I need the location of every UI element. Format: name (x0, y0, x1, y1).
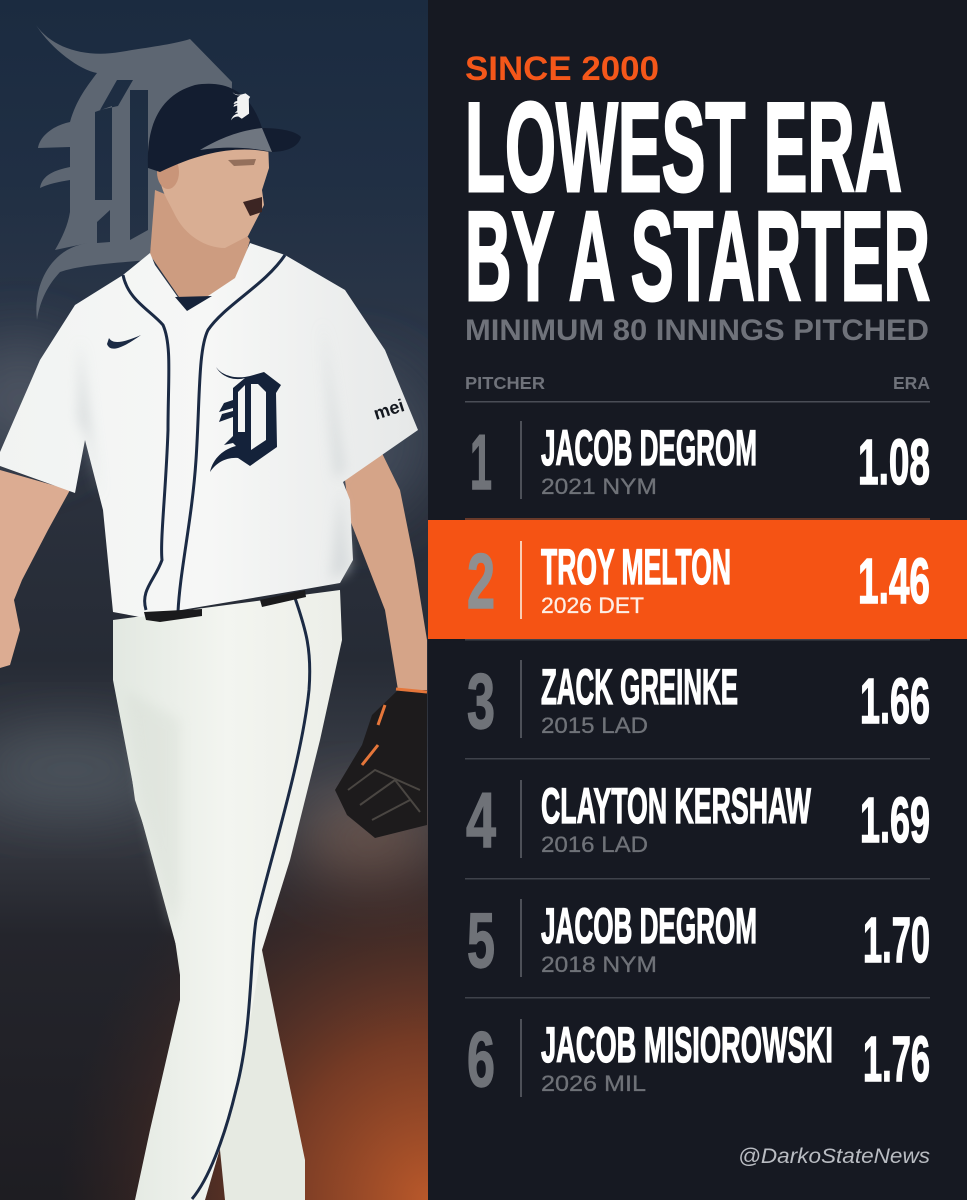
undershirt collar (175, 296, 212, 311)
sleeve patch text: mei (371, 395, 407, 424)
row 3: ZACK GREINKE (541, 659, 738, 715)
back leg (113, 640, 305, 1200)
table header: ERA (893, 373, 930, 393)
left arm and hand (0, 470, 70, 668)
row 2 highlighted: 2 (467, 537, 495, 625)
row 3 (465, 639, 930, 745)
row 6: 2026 MIL (541, 1071, 646, 1096)
table header (465, 373, 930, 402)
icon: chest D logo (210, 367, 281, 472)
panel: photo background (0, 0, 440, 1200)
table header: PITCHER (465, 373, 545, 393)
ear (157, 155, 179, 189)
title (465, 76, 930, 327)
row 5 (465, 878, 930, 984)
row 6 (465, 997, 930, 1103)
row 5: 2018 NYM (541, 952, 657, 977)
row 1: 2021 NYM (541, 474, 657, 499)
front pants (113, 590, 342, 1200)
icon: cap D logo (231, 92, 250, 120)
mouth (243, 197, 262, 216)
player figure (0, 84, 427, 1200)
glove (335, 690, 427, 838)
row 2 highlighted (428, 520, 967, 639)
row 3: 2015 LAD (541, 713, 648, 738)
icon: Tigers D watermark (36, 25, 232, 320)
right arm (345, 445, 427, 690)
subtitle: MINIMUM 80 INNINGS PITCHED (465, 314, 929, 347)
jersey (0, 243, 418, 617)
row 1 (465, 418, 930, 520)
row 2 highlighted: 2026 DET (541, 593, 644, 618)
row 2 highlighted: TROY MELTON (541, 539, 731, 595)
panel: stats background (428, 0, 967, 1200)
row 1: JACOB DEGROM (541, 420, 757, 476)
nike swoosh (107, 335, 141, 349)
row 3: 3 (467, 657, 495, 745)
pants piping (192, 598, 310, 1199)
cap (148, 84, 301, 172)
cap brim underside (200, 128, 272, 152)
row 6: 6 (467, 1015, 495, 1103)
belt (144, 590, 306, 622)
neck (150, 190, 250, 310)
jersey shading (78, 320, 350, 580)
face (160, 140, 269, 248)
jersey piping (123, 255, 285, 612)
eye (228, 159, 256, 166)
eyebrow: since 2000: SINCE 2000 (465, 50, 659, 88)
row 4: 4 (466, 776, 496, 864)
credit handle: @DarkoStateNews (738, 1145, 931, 1168)
row 1: 1 (470, 418, 492, 506)
row 5: JACOB DEGROM (541, 898, 757, 954)
pants shading (125, 690, 180, 930)
row 5: 5 (467, 896, 495, 984)
row 4 (465, 758, 930, 864)
row 4: 2016 LAD (541, 832, 648, 857)
